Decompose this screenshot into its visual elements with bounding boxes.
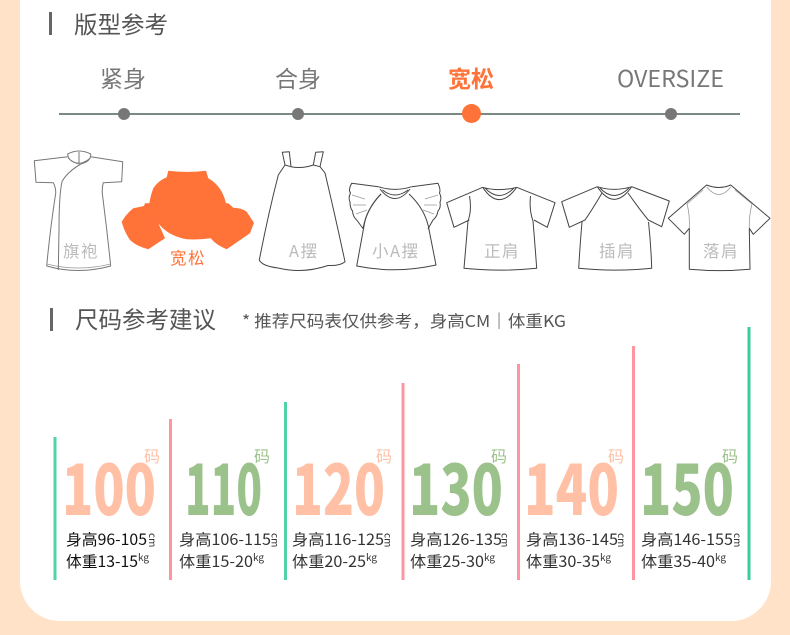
size column 120: 身高116-125 [292,528,384,550]
size column 130: 130 [409,435,503,535]
size column 140: 140 [524,435,619,535]
size column 110 [169,419,284,580]
size column 150: 码 [722,443,738,467]
slider point: tight fit: 紧身 [100,60,146,94]
garment: set-in shoulder tee: 正肩 [484,238,520,262]
size column 110: 身高106-115 [179,528,271,550]
size column 100: kg [138,549,149,564]
size column 130: 体重25-30 [410,550,484,572]
size column 110: cm [268,533,284,547]
size column 130: 身高126-135 [410,528,502,550]
size column 100 [54,435,161,580]
size column 140: 码 [608,443,624,467]
size column 110: 体重15-20 [179,550,253,572]
garment: small A-line top with ruffles [349,183,441,270]
garment: dropped shoulder tee [668,185,770,271]
slider point: oversize [617,60,724,120]
garment: small A-line top with ruffles: 小A摆 [372,238,420,262]
slider point: tight fit [100,60,146,120]
slider point: regular fit: 合身 [275,60,321,94]
size column 120: cm [382,533,396,547]
size column 130: 码 [491,443,507,467]
size column 120: 120 [292,435,385,535]
size column 150 [632,346,746,580]
size column 140: 身高136-145 [526,528,618,550]
size column 140: 体重30-35 [526,550,600,572]
size column 120 [284,402,396,580]
garment: qipao: 旗袍 [63,238,99,262]
size column 140 [517,364,630,580]
garment: set-in shoulder tee [447,187,555,270]
size column 150: 身高146-155 [641,528,733,550]
garment: loose fit orange [122,171,254,269]
size column 120: 码 [376,443,392,467]
size column 130: kg [484,549,495,564]
size column 130 [402,383,514,580]
size column 100: 身高96-105 [66,528,147,550]
garment: A-line dress [259,152,345,270]
slider point: oversize: OVERSIZE [617,60,724,94]
slider point: regular fit [275,60,321,120]
garment: dropped shoulder tee: 落肩 [703,238,739,262]
size column 150: kg [715,549,726,564]
heading: fit reference: 版型参考 [74,6,168,40]
heading: size recommendation: 尺码参考建议 [75,301,216,335]
right edge green bar [748,327,750,580]
size column 150: 150 [640,435,734,535]
size column 130: cm [498,533,514,547]
size column 100: 100 [62,435,156,535]
garment: raglan shoulder tee: 插肩 [599,238,635,262]
slider point: loose fit selected [448,60,494,123]
size column 110: kg [253,549,264,564]
fit scale slider [59,60,740,123]
note: size chart reference: * 推荐尺码表仅供参考，身高CM｜体重KG [242,308,566,332]
garment: A-line dress: A摆 [289,238,319,262]
size column 140: kg [600,549,611,564]
slider point: loose fit selected: 宽松 [448,60,494,94]
size column 100: 体重13-15 [66,550,138,572]
size column 120: 体重20-25 [292,550,366,572]
size column 150: cm [731,533,746,547]
size column 110: 码 [254,443,270,467]
garment: loose fit orange: 宽松 [170,245,206,269]
size column 110: 110 [185,435,262,535]
size column 150: 体重35-40 [641,550,715,572]
size column 120: kg [366,549,377,564]
garment: raglan shoulder tee [562,187,669,270]
size column 100: cm [146,533,161,547]
garment: qipao [34,151,123,270]
size column 140: cm [615,533,630,547]
size column 100: 码 [144,443,160,467]
